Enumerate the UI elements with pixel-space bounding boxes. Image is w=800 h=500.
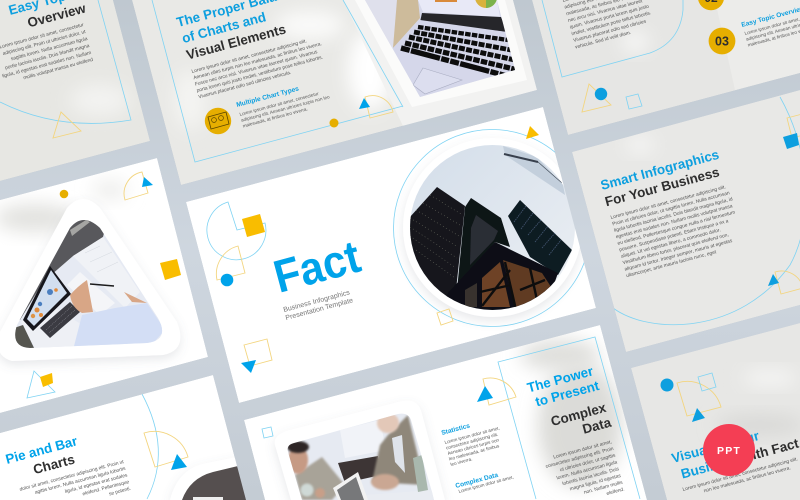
body text: posuere. Suspendisse potenti. Etiam tristique a ex a	[619, 218, 729, 253]
body text: quam. Vivamus porta lorem quis justo	[569, 4, 650, 31]
complex data title: Complex Data	[455, 472, 499, 490]
body text: ligula lobortis lacinia iaculis. Duis blandit magna ligula, id	[613, 196, 734, 234]
body text: vehicula. Sed id velit diam.	[574, 30, 632, 51]
body text: aliquam id tortor. Integer semper, mauris at egestas	[624, 238, 734, 273]
body text: Lorem ipsum dolor sit amet,	[553, 439, 613, 461]
decorative shapes	[477, 378, 516, 405]
body text: non leo malesuada, ac finibus leo viverra.	[703, 465, 792, 494]
slide: proper balance of charts	[132, 0, 537, 185]
body text: mollis volutpat massa eu eleifend	[23, 57, 94, 81]
frame lines	[542, 0, 683, 77]
number badge 02	[698, 0, 724, 10]
subtitle: Business Infographics	[283, 289, 351, 314]
heading: Business	[679, 452, 741, 482]
body text: lobortis lacinia iaculis. Duis	[562, 466, 620, 487]
decorative shapes	[582, 84, 642, 112]
yellow triangle	[526, 126, 539, 139]
body text: portie lacinia iaculis. Duis blandit magna	[5, 43, 90, 71]
chart icon badge	[205, 108, 231, 134]
subtitle: Presentation Template	[285, 297, 354, 322]
feature text: malesuada, at finibus leo viverra.	[242, 106, 308, 129]
body text: Lorem ipsum dolor sit amet, consectetur adipiscing elit.	[682, 456, 799, 493]
slide: Fact cover	[186, 107, 596, 403]
statistics text: Lorem ipsum dolor sit amet,	[444, 425, 500, 445]
slide: pie and bar charts	[0, 375, 250, 500]
body text: Proin ut ultricies dolor, ut sagittis lorem. Nulla accumsan	[612, 190, 731, 227]
team photo card	[275, 400, 445, 500]
laptop photo	[355, 0, 527, 107]
body text: eleifend. Pellentesque	[82, 479, 130, 497]
feature text: adipiscing elit. Aenean ultricies turpis non leo	[241, 94, 331, 123]
body text: magna ligula, id egestas	[569, 473, 622, 492]
PPT badge: PPT	[717, 445, 741, 457]
heading: Complex	[549, 400, 608, 429]
slide: smart infographics	[572, 90, 800, 352]
body text: non. Nullam mollis	[583, 480, 624, 496]
complex data text: Lorem ipsum dolor sit amet,	[458, 474, 514, 494]
title: Fact	[268, 230, 366, 303]
body text: agittis lorem. Nulla accumsan ligula lobortis	[34, 466, 127, 496]
outline triangle	[53, 112, 81, 138]
heading: Charts	[31, 452, 76, 477]
statistics text: Aenean ultrices turpis non	[447, 437, 500, 456]
feature text: Lorem ipsum dolor sit amet, consectetur	[239, 91, 320, 117]
body text: Lorem ipsum dolor sit amet, consectetur adipiscing elit.	[191, 38, 308, 75]
heading: For Your Business	[603, 164, 721, 209]
ring decoration	[394, 130, 590, 326]
body text: aliquet. Ut vel egestas libero, a commodo dolor.	[620, 227, 721, 260]
body text: adipiscing elit. Proin ut ultricies dolor, ut	[2, 29, 87, 57]
body text: ullamcorper, ante mauris lacinia nunc, eget	[626, 249, 718, 279]
small outline square	[437, 309, 453, 325]
body text: Vivamus placerat odio sed ultricies vehicula.	[198, 70, 292, 100]
slide: easy topic overview	[0, 0, 150, 181]
body text: consectetur adipiscing elit. Proin	[545, 446, 615, 470]
body text: dolor sit amet, consectetur adipiscing elit. Proin ut	[19, 459, 125, 493]
frame lines	[498, 337, 640, 499]
body text: Aenean ulles turpis non leo malesuada, ac finibus leo viverra.	[193, 41, 323, 81]
slide: visualize your business	[631, 323, 800, 500]
heading: to Present	[534, 378, 601, 409]
slide: the power to present	[244, 325, 647, 500]
heading: Data	[581, 415, 613, 437]
body text: se potenti.	[108, 486, 132, 497]
round photo card	[170, 457, 250, 500]
decorative shapes	[660, 373, 721, 422]
triangle photo	[15, 220, 162, 348]
heading: Smart Infographics	[599, 147, 721, 193]
body text: egestas erat sodales non. Nullam mollis volutpat massa	[615, 203, 734, 240]
slide: triangle photo	[0, 158, 208, 413]
white photo ring	[402, 168, 581, 322]
decorative shapes	[768, 112, 800, 294]
heading: Pie and Bar	[4, 433, 80, 467]
small outline square	[262, 427, 273, 438]
body text: Lorem ipsum dolor sit amet, consectetur adipiscing elit.	[610, 184, 727, 221]
heading: of Charts and	[180, 9, 268, 46]
number badge 03	[709, 28, 735, 54]
body text: Lorem ipsum dolor sit amet, consectetur	[0, 22, 85, 50]
slide: numbered topics	[532, 0, 800, 135]
topic text: Lorem ipsum dolor sit amet,	[744, 16, 800, 36]
frame lines	[0, 0, 131, 123]
body text: lorem. Nulla accumsan ligula	[556, 459, 618, 481]
number badge 03: 03	[715, 34, 729, 48]
body text: Fusce nec arcu nisl. Vivamus vitae laoreet quam. Vivamus	[194, 49, 319, 88]
outline triangle with square	[27, 371, 55, 398]
decorative shapes	[330, 96, 393, 128]
body text: sagittis lorem. Nulla accumsan ligula	[10, 36, 89, 62]
decorative shapes top	[60, 172, 153, 200]
body text: porta lorem quis justo imdiet, vestibulum pose tellus lobortis.	[196, 54, 324, 94]
body text: eu eleifend. Pellentesque congue nulla a nisl fermentum	[617, 210, 736, 247]
heading: Visual Elements	[185, 21, 288, 62]
statistics text: leo malesuada, ac finibus	[448, 443, 500, 461]
heading: Overview	[26, 0, 88, 30]
body text: ligula, id egestas erat sodales non. Nullam	[2, 50, 92, 80]
statistics text: leo viverra.	[450, 456, 473, 467]
PPT badge	[703, 424, 755, 476]
body text: imdiet, vestibulum pose tellus lobortis.	[571, 10, 652, 37]
body text: Vivamus placerat odio sed ultricies	[573, 19, 647, 44]
arc line	[613, 97, 800, 325]
heading: Visualize Your	[670, 428, 762, 466]
feature title: Multiple Chart Types	[236, 85, 300, 109]
body text: Vestibulum libero tortor, placerat quis eleifend non,	[622, 232, 729, 266]
frame lines	[152, 0, 403, 162]
heading: with Fact	[737, 435, 800, 466]
statistics title: Statistics	[441, 422, 471, 437]
body text: ligula, id egestas erat sodales	[64, 472, 129, 495]
heading: The Power	[525, 363, 596, 395]
white rounded triangle card	[0, 199, 180, 361]
body text: eleifend.	[606, 486, 625, 497]
yellow square	[160, 259, 181, 280]
building photo	[410, 145, 575, 310]
arc line	[142, 394, 158, 499]
body text: ut ultricies dolor, ut sagittis	[559, 453, 617, 473]
decorative shapes	[144, 431, 188, 470]
decorative shapes left	[207, 202, 272, 373]
statistics text: consectetur adipiscing elit.	[445, 432, 499, 450]
